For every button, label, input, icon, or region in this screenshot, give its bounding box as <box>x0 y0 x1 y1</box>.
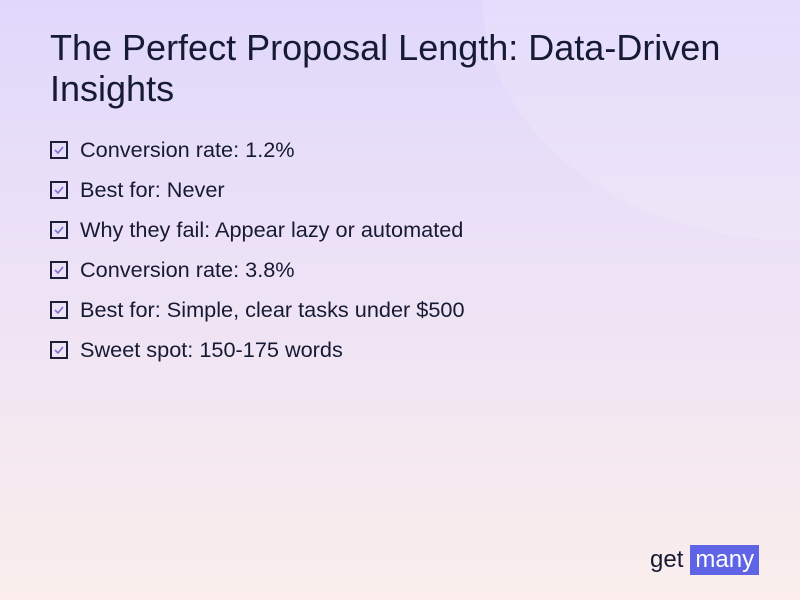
logo: many <box>695 546 754 573</box>
item 3: Why they fail: Appear lazy or automated <box>80 217 463 242</box>
item 1: Conversion rate: 1.2% <box>80 137 295 162</box>
item 2: Best for: Never <box>80 177 225 202</box>
decorative circle <box>482 0 800 240</box>
title: The Perfect Proposal Length: Data-Driven Insights <box>50 27 720 109</box>
logo: get <box>650 546 683 573</box>
checklist <box>50 137 465 362</box>
logo <box>650 545 759 575</box>
item 6: Sweet spot: 150-175 words <box>80 337 343 362</box>
item 5: Best for: Simple, clear tasks under $500 <box>80 297 465 322</box>
item 4: Conversion rate: 3.8% <box>80 257 295 282</box>
